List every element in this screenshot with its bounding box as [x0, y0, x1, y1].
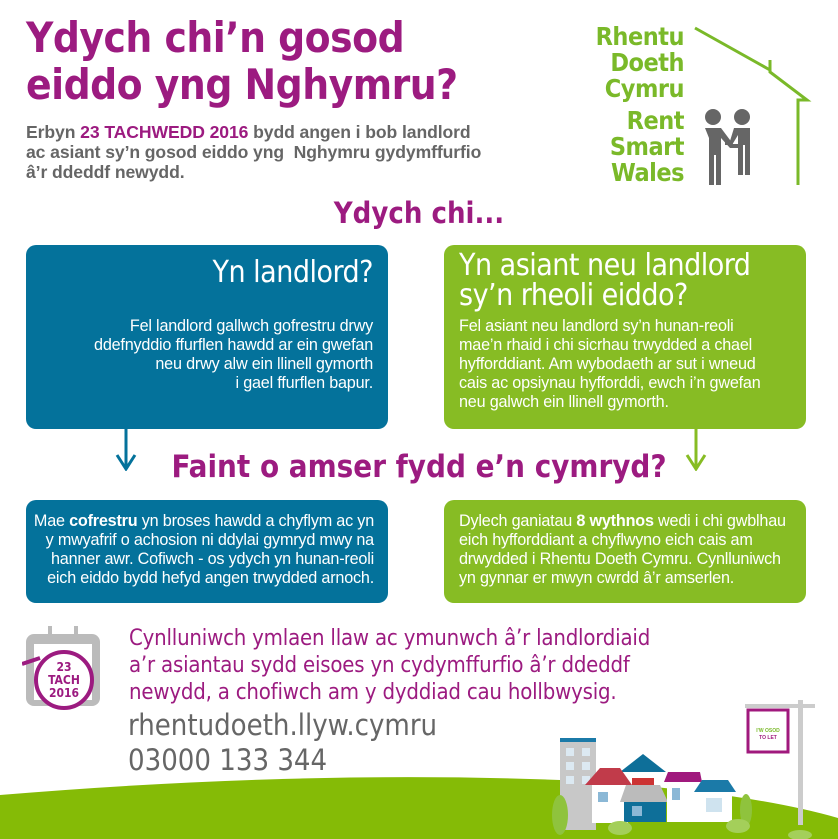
subtitle: â’r ddeddf newydd.	[26, 162, 185, 182]
title: eiddo yng Nghymru?	[26, 60, 458, 109]
subtitle	[26, 122, 481, 182]
arrow: green	[686, 429, 706, 471]
text: website and phone: rhentudoeth.llyw.cymru	[128, 708, 437, 742]
arrow: blue	[116, 429, 136, 471]
panel: registration time: eich eiddo bydd hefyd angen trwydded arnoch.	[47, 569, 374, 587]
illustration: hill, houses and sign: TO LET	[759, 735, 777, 741]
title	[26, 13, 458, 109]
panel: registration time: hanner awr. Cofiwch - os ydych yn hunan-reoli	[51, 550, 374, 568]
logo text: Smart	[610, 132, 684, 161]
logo house and people	[694, 26, 812, 185]
subtitle: ac asiant sy’n gosod eiddo yng Nghymru gydymffurfio	[26, 142, 481, 162]
logo text: Rhentu	[596, 22, 684, 51]
text: website and phone: 03000 133 344	[128, 743, 327, 777]
text: agent	[459, 317, 761, 411]
icon: calendar: 2016	[49, 686, 79, 700]
heading: Yn landlord: Yn landlord?	[213, 255, 373, 290]
text: agent: Fel asiant neu landlord sy’n hunan-reoli	[459, 317, 734, 335]
panel: licence time: drwydded i Rhentu Doeth Cymru. Cynlluniwch	[459, 550, 781, 568]
panel: agent	[444, 245, 806, 429]
text: website and phone	[128, 708, 437, 777]
panel: licence time: Dylech ganiatau 8 wythnos wedi i chi gwblhau	[459, 512, 786, 530]
text: landlord: neu drwy alw ein llinell gymorth	[155, 355, 373, 373]
text: agent: neu galwch ein llinell gymorth.	[459, 393, 669, 411]
icon: calendar	[22, 626, 100, 710]
text: landlord	[94, 317, 374, 392]
text: landlord: ddefnyddio ffurflen hawdd ar ein gwefan	[94, 336, 373, 354]
panel: registration time	[26, 500, 388, 603]
logo	[596, 22, 812, 187]
panel: licence time: eich hyfforddiant a chyflwyno eich cais am	[459, 531, 753, 549]
illustration: hill, houses and sign: I'W OSOD	[756, 728, 780, 734]
heading: Faint o amser: Faint o amser fydd e’n cymryd?	[171, 449, 667, 485]
text: landlord: Fel landlord gallwch gofrestru drwy	[130, 317, 373, 335]
panel: registration time: y mwyafrif o achosion ni ddylai gymryd mwy na	[46, 531, 374, 549]
icon: calendar: TACH	[48, 673, 80, 687]
text: plan ahead: newydd, a chofiwch am y dyddiad cau hollbwysig.	[129, 680, 616, 705]
logo text: Doeth	[610, 48, 684, 77]
logo text	[596, 22, 684, 187]
text: agent: cais ac opsiynau hyfforddi, ewch i’n gwefan	[459, 374, 761, 392]
text: agent: mae’n rhaid i chi sicrhau trwydded a chael	[459, 336, 752, 354]
heading: agent: Yn asiant neu landlord	[459, 248, 750, 283]
logo text: Wales	[611, 158, 684, 187]
panel: licence time: yn gynnar er mwyn cwrdd â’r amserlen.	[459, 569, 734, 587]
text: plan ahead: a’r asiantau sydd eisoes yn cydymffurfio â’r ddeddf	[129, 653, 630, 678]
text: plan ahead: Cynlluniwch ymlaen llaw ac ymunwch â’r landlordiaid	[129, 626, 650, 651]
panel: landlord	[26, 245, 388, 429]
panel: licence time	[444, 500, 806, 603]
logo text: Cymru Rent	[605, 74, 684, 135]
panel: registration time: Mae cofrestru yn broses hawdd a chyflym ac yn	[34, 512, 374, 530]
text: agent: hyfforddiant. Am wybodaeth ar sut i wneud	[459, 355, 756, 373]
heading: Ydych chi: Ydych chi...	[334, 196, 504, 230]
text: landlord: i gael ffurflen bapur.	[236, 374, 373, 392]
heading: agent: sy’n rheoli eiddo?	[459, 278, 688, 313]
illustration: hill, houses and sign	[0, 700, 838, 839]
heading: agent	[459, 248, 750, 313]
subtitle: Erbyn 23 TACHWEDD 2016 bydd angen i bob landlord	[26, 122, 471, 142]
title: Ydych chi’n gosod	[26, 13, 404, 62]
text: plan ahead	[129, 626, 650, 705]
icon: calendar: 23	[56, 660, 72, 674]
